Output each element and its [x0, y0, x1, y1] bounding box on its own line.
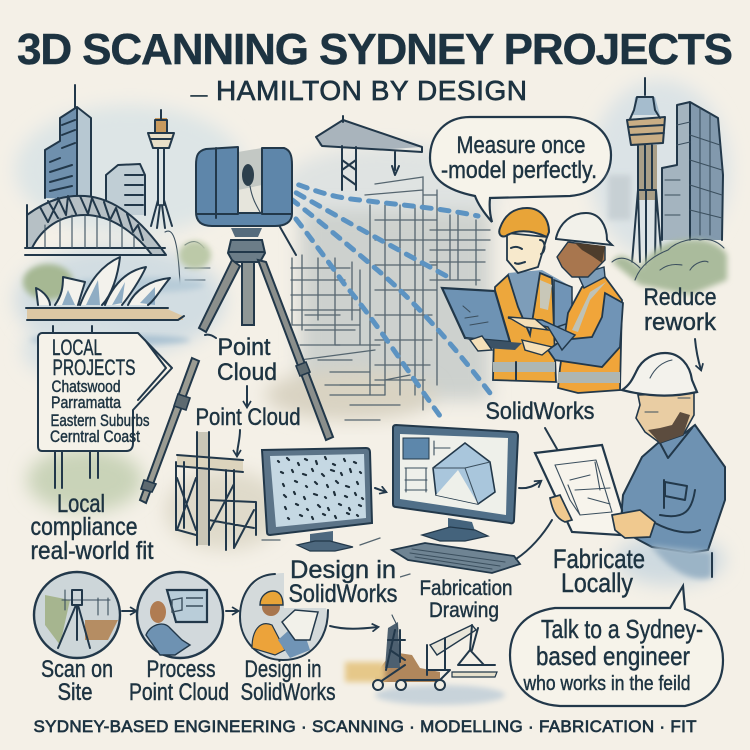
label: Fabrication Drawing: Fabrication: [420, 577, 512, 600]
subtitle: —: [190, 85, 208, 104]
label: scan on site: Site: [58, 679, 92, 706]
arrow: rework to engineer: [695, 339, 701, 370]
worker two: [508, 213, 623, 393]
skyscraper: [45, 85, 91, 200]
label: Fabricate Locally: Locally: [561, 568, 633, 598]
building under construction: [365, 177, 490, 410]
speech bubble: talk to an engineer: based engineer: [536, 641, 690, 671]
arrow: step 2 to step 3: [226, 610, 238, 612]
sign text: [50, 335, 150, 446]
keyboard: [392, 543, 520, 573]
subtitle: HAMILTON BY DESIGN: [216, 75, 527, 106]
Harbour Bridge: [25, 196, 166, 255]
local projects road sign: [38, 326, 172, 488]
label: process point cloud: Point Cloud: [129, 679, 229, 706]
sign posts: [53, 326, 98, 488]
label: Point Cloud: Point Cloud: [196, 404, 300, 431]
crane: [316, 116, 422, 190]
speech bubble: talk to an engineer: [510, 586, 723, 706]
process step 1: scan on site: [34, 572, 120, 706]
label: Point Cloud (stacked): Point: [218, 334, 271, 361]
sign board: [38, 333, 172, 451]
watercolour washes: [15, 80, 730, 705]
point cloud monitor: [262, 448, 372, 551]
speech bubble: measure once: [430, 117, 611, 222]
fabrication machinery: [345, 615, 497, 690]
laptop: [442, 288, 522, 350]
Sydney Opera House: [26, 257, 184, 320]
two workers with laptop: [442, 208, 623, 393]
label: local compliance: [30, 490, 154, 565]
label: scan on site: [41, 656, 113, 706]
second harbour span: [165, 231, 210, 285]
label: Design in SolidWorks large: SolidWorks: [288, 580, 398, 608]
scaffold left: [291, 255, 385, 395]
label: design in SolidWorks: Design in: [244, 656, 322, 683]
label: Design in SolidWorks large: [284, 556, 400, 608]
process step 3: design in SolidWorks: [239, 573, 336, 706]
label: local compliance: real-world fit: [30, 537, 154, 565]
label: Fabrication Drawing: [420, 577, 512, 622]
label: Point Cloud (stacked): Cloud: [217, 359, 277, 386]
hands holding sheet: [550, 495, 655, 538]
Sydney Tower left: [148, 110, 174, 228]
scanner head: [196, 147, 292, 226]
label: SolidWorks: SolidWorks: [486, 398, 594, 425]
label: local compliance: compliance: [30, 513, 138, 541]
label: local compliance: Local: [57, 490, 105, 518]
icon: design in SolidWorks: [239, 573, 328, 661]
site ground: [262, 345, 410, 580]
sign text: Eastern Suburbs: [50, 411, 150, 430]
icon: process point cloud: [137, 572, 223, 658]
sign text: Parramatta: [51, 393, 121, 412]
sign text: Cerntral Coast: [50, 427, 140, 446]
label: Reduce rework: rework: [644, 309, 717, 336]
right skyscraper: [662, 102, 723, 240]
worker one: [493, 208, 574, 382]
green shrubs and water: [23, 241, 211, 345]
speech bubble: talk to an engineer: Talk to a Sydney-: [541, 614, 703, 644]
label: Fabrication Drawing: Drawing: [429, 599, 499, 622]
engineer reading drawing: [535, 353, 725, 579]
timber scaffold: [176, 432, 256, 550]
arrow: step 1 to step 2: [122, 610, 136, 612]
sign text: Chatswood: [52, 377, 120, 396]
face: [636, 393, 694, 443]
sign text: PROJECTS: [52, 355, 136, 380]
label: Fabricate Locally: Fabricate: [553, 544, 645, 574]
speech bubble: talk to an engineer: who works in the feild: [523, 673, 690, 695]
green trees: [612, 239, 727, 295]
connector: SolidWorks to drawing: [545, 428, 557, 449]
left Sydney skyline: [23, 85, 211, 345]
label: Reduce rework: [644, 284, 717, 336]
shirt: [620, 425, 725, 553]
right Sydney skyline: [608, 78, 727, 295]
icon: scan on site: [34, 572, 120, 658]
faint building: [608, 175, 631, 220]
label: Reduce rework: Reduce: [644, 284, 716, 311]
scanner mount: [228, 228, 265, 262]
mid-rise building: [106, 164, 145, 215]
tripod legs: [140, 227, 333, 503]
point cloud dots: [278, 457, 363, 519]
drawing sheet: [535, 445, 622, 535]
connector: keyboard to drawing: [516, 520, 552, 559]
3D laser scanner on tripod: [140, 147, 333, 503]
label: Point Cloud (stacked): [217, 334, 277, 386]
footer strip: SYDNEY-BASED ENGINEERING · SCANNING · MODELLING · FABRICATION · FIT: [34, 717, 696, 736]
arrow: CAD to drawing: [519, 481, 541, 488]
arrow: to scaffold: [237, 430, 240, 456]
arrow: Point Cloud down: [246, 386, 248, 407]
label: design in SolidWorks: [240, 656, 336, 706]
label: scan on site: Scan on: [41, 656, 113, 683]
scanning beams: [262, 172, 493, 420]
speech bubble: measure once: Measure once: [456, 132, 586, 159]
hard hat: [622, 353, 697, 396]
label: process point cloud: [129, 656, 229, 706]
hands: [470, 317, 552, 355]
title: 3D SCANNING SYDNEY PROJECTS: [17, 25, 733, 74]
process step 2: process point cloud: [129, 572, 229, 706]
label: Fabricate Locally: [553, 544, 645, 598]
sign text: LOCAL: [52, 335, 102, 360]
label: design in SolidWorks: SolidWorks: [240, 679, 336, 706]
arrow: step 3 to fabrication: [330, 626, 378, 629]
label: Design in SolidWorks large: Design in: [290, 556, 396, 584]
SolidWorks CAD monitor: [393, 425, 518, 541]
speech bubble: measure once: -model perfectly.: [441, 157, 597, 184]
construction site: [262, 116, 490, 580]
Sydney Tower right: [627, 78, 665, 265]
arrow: monitor to CAD: [375, 488, 386, 492]
label: process point cloud: Process: [146, 656, 216, 683]
